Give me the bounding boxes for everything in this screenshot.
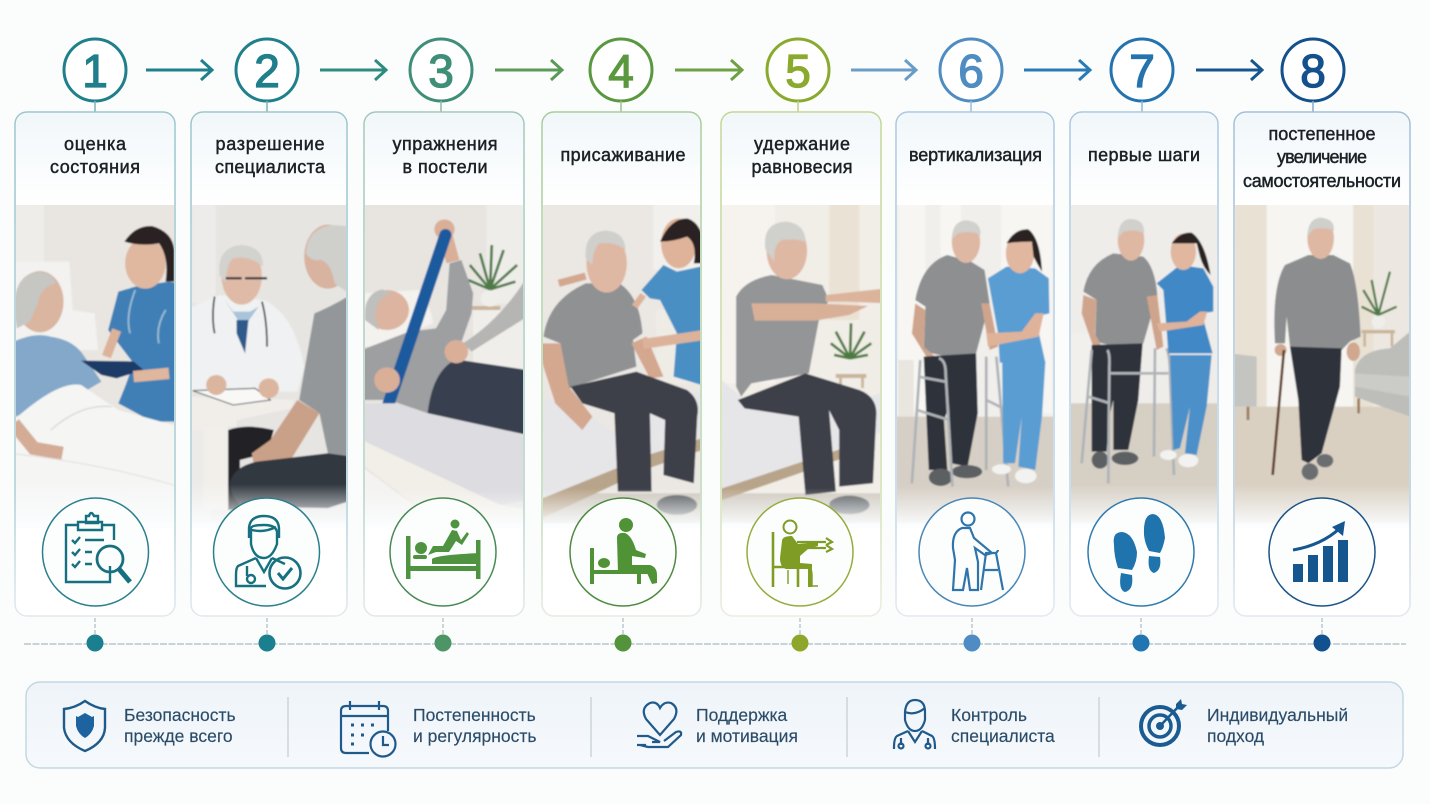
step number 8: [1282, 39, 1344, 112]
panel: step 6 standing: [893, 112, 1059, 616]
principle: safety: прежде всего: [124, 726, 233, 746]
step number 5: [767, 39, 829, 112]
heading: step 4: присаживание: [560, 145, 686, 165]
photo: first steps with walker: [1067, 203, 1223, 523]
heading: step 8: увеличение: [1277, 147, 1367, 167]
step number 2: [236, 39, 298, 112]
icon: footprints: [1088, 498, 1194, 606]
heading: step 3: упражнения: [392, 134, 498, 154]
heading: step 5: удержание: [754, 134, 850, 154]
principle: specialist supervision: [894, 700, 1055, 749]
step number 1: [64, 39, 126, 112]
step number 6: 6: [958, 45, 984, 97]
panel: step 8 growing independence: [1230, 112, 1417, 616]
icon: target with arrow: [1141, 699, 1187, 745]
step number 6: [940, 39, 1002, 112]
icon: rising bar chart: [1269, 498, 1375, 606]
photo fade: [16, 480, 174, 528]
arrow 4 to 5: [675, 60, 742, 80]
photo: bed exercise with band: [362, 203, 531, 523]
photo: man walking with cane: [1230, 203, 1417, 523]
arrow 5 to 6: [851, 60, 916, 80]
principle: individual approach: [1141, 699, 1348, 746]
arrow 6 to 7: [1024, 60, 1090, 80]
heading: step 2: специалиста: [215, 157, 326, 177]
step number 7: [1111, 39, 1173, 112]
principle: safety: [64, 701, 236, 751]
heading: step 8: постепенное: [1268, 124, 1376, 144]
panel: principles: [26, 682, 1403, 768]
heading: step 3: в постели: [402, 157, 488, 177]
principle: gradual and regular: и регулярность: [413, 726, 537, 746]
arrow 7 to 8: [1196, 60, 1262, 80]
photo fade: [192, 484, 346, 528]
panel: step 5 balance: [718, 112, 887, 616]
photo: doctor and patient: [188, 203, 353, 523]
photo fade: [543, 488, 700, 528]
step number 4: [590, 39, 652, 112]
step number 4: 4: [608, 45, 634, 97]
photo: sitting up with nurse: [538, 203, 707, 523]
arrow 1 to 2: [146, 60, 212, 80]
icon: clipboard with magnifier: [42, 498, 148, 606]
icon: seated balance with arms forward: [747, 498, 853, 606]
icon: shield: [64, 701, 105, 751]
heading: step 1: состояния: [50, 157, 140, 177]
principle: specialist supervision: Контроль: [951, 705, 1027, 725]
icon: doctor: [894, 700, 935, 749]
principle: support and motivation: [637, 703, 798, 747]
step number 5: 5: [785, 45, 811, 97]
step number 1: 1: [82, 45, 108, 97]
panel: step 2 specialist approval: [188, 112, 353, 616]
photo fade: [1235, 484, 1409, 528]
principle: specialist supervision: специалиста: [951, 726, 1055, 746]
photo fade: [1071, 484, 1217, 528]
panel: step 3 bed exercises: [362, 112, 531, 616]
heading: step 8: самостоятельности: [1243, 171, 1401, 191]
icon: doctor with check mark: [214, 498, 320, 606]
heading: step 6: вертикализация: [909, 145, 1042, 165]
photo: patient and nurse: [16, 205, 174, 493]
panel: step 7 first steps: [1067, 112, 1223, 616]
icon: calendar with clock: [341, 701, 396, 756]
principle: individual approach: Индивидуальный: [1207, 705, 1348, 725]
icon: exercise in bed: [390, 498, 496, 606]
timeline: [24, 606, 1406, 652]
icon: person sitting on bed: [570, 498, 676, 606]
panel: step 4 sitting up: [538, 112, 707, 616]
photo: patient standing with walker and nurse: [893, 203, 1059, 523]
photo fade: [722, 488, 880, 528]
step number 3: [410, 39, 472, 112]
arrow 2 to 3: [320, 60, 386, 80]
icon: heart in hand: [637, 703, 681, 747]
principle: support and motivation: Поддержка: [696, 705, 788, 725]
step number 8: 8: [1300, 45, 1326, 97]
panel: step 1 assessment: [10, 112, 179, 616]
heading: step 2: разрешение: [216, 134, 324, 154]
icon: person with walker: [919, 498, 1025, 606]
principle: support and motivation: и мотивация: [696, 726, 798, 746]
heading: step 7: первые шаги: [1088, 145, 1200, 165]
arrow 3 to 4: [495, 60, 562, 80]
heading: step 5: равновесия: [752, 157, 852, 177]
step number 7: 7: [1129, 45, 1155, 97]
photo: balance while sitting: [718, 203, 887, 523]
principle: gradual and regular: Постепенность: [413, 705, 536, 725]
photo fade: [365, 490, 523, 528]
principle: gradual and regular: [341, 701, 537, 756]
step number 3: 3: [428, 45, 454, 97]
principle: individual approach: подход: [1207, 726, 1264, 746]
heading: step 1: оценка: [64, 134, 127, 154]
principle: safety: Безопасность: [124, 705, 236, 725]
step number 2: 2: [254, 45, 280, 97]
photo fade: [897, 486, 1053, 528]
